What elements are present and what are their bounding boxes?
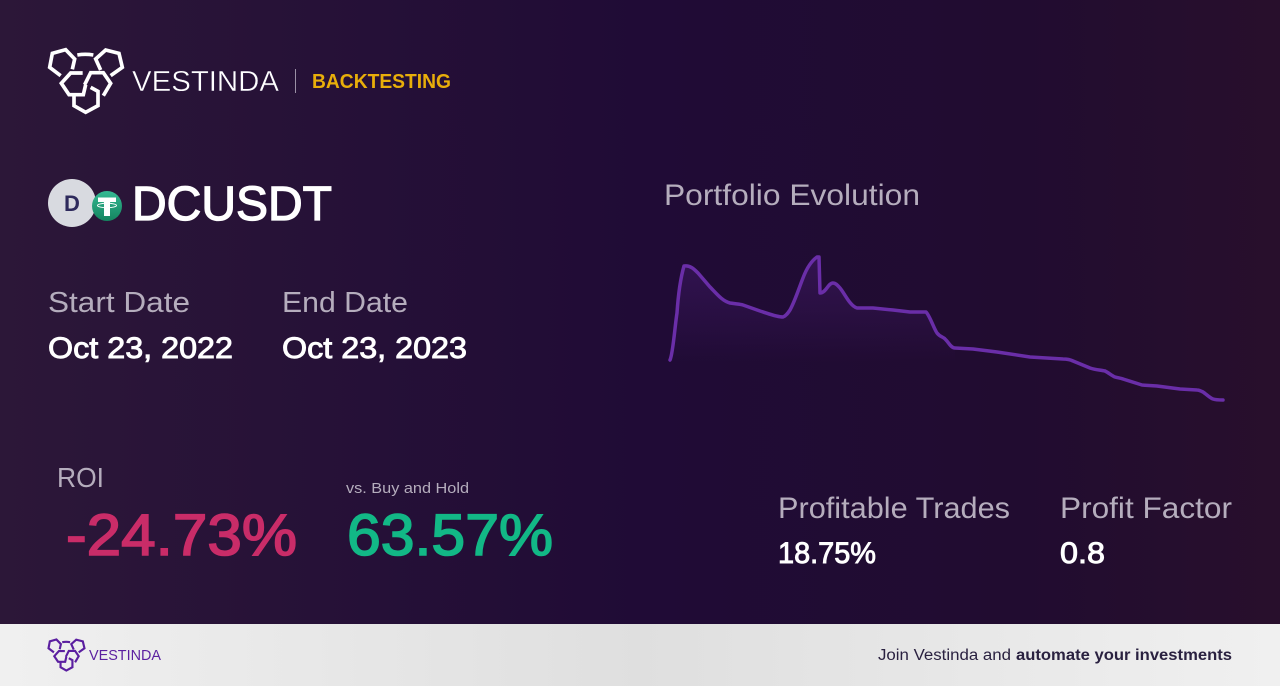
- header logo: [50, 50, 451, 112]
- profitable trades: 18.75%: [778, 537, 876, 570]
- line chart: portfolio evolution: [670, 257, 1223, 400]
- ROI: ROI: [57, 462, 104, 493]
- pair heading: [48, 178, 332, 231]
- icon: tether coin: [92, 191, 122, 221]
- ROI: -24.73%: [66, 503, 297, 568]
- chart heading: Portfolio Evolution: [664, 179, 920, 212]
- call to action: Join Vestinda and: [878, 647, 1011, 664]
- vs buy and hold: 63.57%: [347, 503, 553, 568]
- start date: [48, 287, 233, 365]
- end date: End Date: [282, 287, 408, 319]
- pair name: DCUSDT: [132, 178, 332, 231]
- end date: Oct 23, 2023: [282, 332, 467, 365]
- footer logo: [49, 640, 161, 671]
- footer: [0, 624, 1280, 686]
- profitable trades: Profitable Trades: [778, 492, 1010, 525]
- start date: Oct 23, 2022: [48, 332, 233, 365]
- ROI: [57, 462, 297, 568]
- call to action: [878, 647, 1232, 664]
- profitable trades: [778, 492, 1010, 570]
- brand name: VESTINDA: [132, 66, 280, 98]
- icon: D coin: [48, 179, 96, 227]
- profit factor: Profit Factor: [1060, 492, 1232, 525]
- vs buy and hold: vs. Buy and Hold: [346, 480, 469, 497]
- footer logo: VESTINDA: [89, 647, 161, 664]
- start date: Start Date: [48, 287, 190, 319]
- backtesting label: BACKTESTING: [312, 71, 451, 93]
- profit factor: [1060, 492, 1232, 570]
- icon: D coin: D: [64, 191, 80, 216]
- call to action: automate your investments: [1016, 647, 1232, 664]
- icon: vestinda hexagons purple: [49, 640, 84, 671]
- profit factor: 0.8: [1060, 537, 1105, 570]
- end date: [282, 287, 467, 365]
- icon: vestinda hexagons: [50, 50, 122, 112]
